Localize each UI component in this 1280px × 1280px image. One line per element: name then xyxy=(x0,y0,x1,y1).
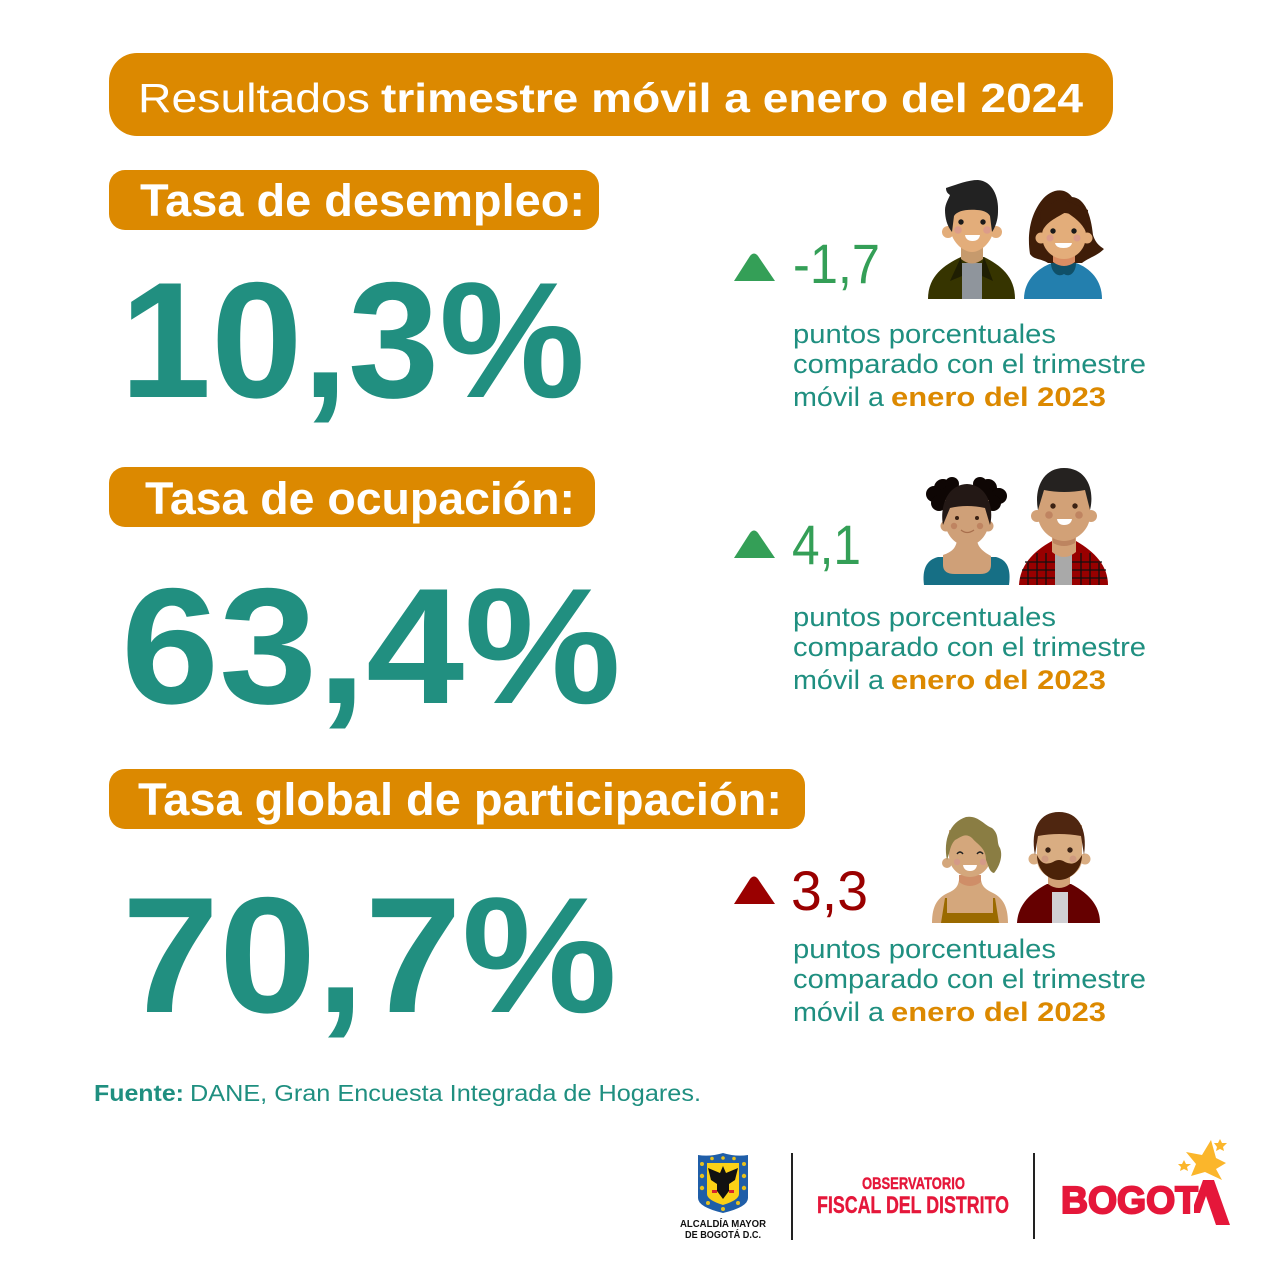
logo: Bogotá xyxy=(1061,1139,1230,1225)
description: ocupación xyxy=(793,602,1146,695)
description: ocupación: enero del 2023 xyxy=(891,665,1106,695)
heading: tasa de ocupación: Tasa de ocupación: xyxy=(145,473,575,524)
icon: man with red plaid shirt xyxy=(1019,468,1108,585)
source note: Fuente: xyxy=(94,1080,184,1106)
indicator: ocupación change: 4,1 xyxy=(792,513,861,576)
logo: Alcaldía Mayor de Bogotá: DE BOGOTÁ D.C. xyxy=(685,1228,761,1241)
logo: Alcaldía Mayor de Bogotá: ALCALDÍA MAYOR xyxy=(680,1217,767,1230)
logo: Observatorio Fiscal del Distrito xyxy=(817,1174,1009,1219)
logo: Observatorio Fiscal del Distrito: FISCAL DEL DISTRITO xyxy=(817,1192,1009,1219)
indicator: ocupación change xyxy=(734,513,861,576)
indicator: participación change xyxy=(734,859,868,922)
title: Resultados xyxy=(138,75,370,121)
description: participación: puntos porcentuales xyxy=(793,934,1056,964)
description: ocupación: móvil a xyxy=(793,665,885,695)
description: desempleo xyxy=(793,319,1146,412)
divider xyxy=(1033,1153,1035,1239)
description: participación: enero del 2023 xyxy=(891,997,1106,1027)
source note: DANE, Gran Encuesta Integrada de Hogares. xyxy=(190,1080,701,1106)
logo: Alcaldía Mayor de Bogotá xyxy=(680,1153,767,1241)
description: ocupación: comparado con el trimestre xyxy=(793,632,1146,662)
description: participación: comparado con el trimestre xyxy=(793,964,1146,994)
indicator: desempleo change xyxy=(734,232,880,295)
title xyxy=(109,53,1113,136)
logo: Observatorio Fiscal del Distrito: OBSERVATORIO xyxy=(862,1174,965,1193)
description: ocupación: puntos porcentuales xyxy=(793,602,1056,632)
description: participación: móvil a xyxy=(793,997,885,1027)
icon: man with beard xyxy=(1017,812,1100,923)
description: desempleo: enero del 2023 xyxy=(891,382,1106,412)
big number: participación: 70,7% xyxy=(122,863,617,1047)
icon: woman with blue sweater xyxy=(1024,190,1104,299)
description: desempleo: puntos porcentuales xyxy=(793,319,1056,349)
big number: ocupación: 63,4% xyxy=(121,554,621,738)
icon: woman with olive hair xyxy=(932,817,1008,923)
description: participación xyxy=(793,934,1146,1027)
icon: man with green jacket xyxy=(928,180,1015,299)
description: desempleo: comparado con el trimestre xyxy=(793,349,1146,379)
indicator: desempleo change: -1,7 xyxy=(793,232,880,295)
heading: tasa global de participación: Tasa global de participación: xyxy=(138,774,782,825)
heading: tasa de desempleo: Tasa de desempleo: xyxy=(140,175,585,226)
icon: woman with buns xyxy=(924,477,1010,585)
logo: Bogotá: BOGOT xyxy=(1061,1180,1198,1222)
title: trimestre móvil a enero del 2024 xyxy=(381,75,1083,121)
indicator: participación change: 3,3 xyxy=(791,859,868,922)
description: desempleo: móvil a xyxy=(793,382,885,412)
divider xyxy=(791,1153,793,1240)
big number: desempleo: 10,3% xyxy=(120,248,585,432)
